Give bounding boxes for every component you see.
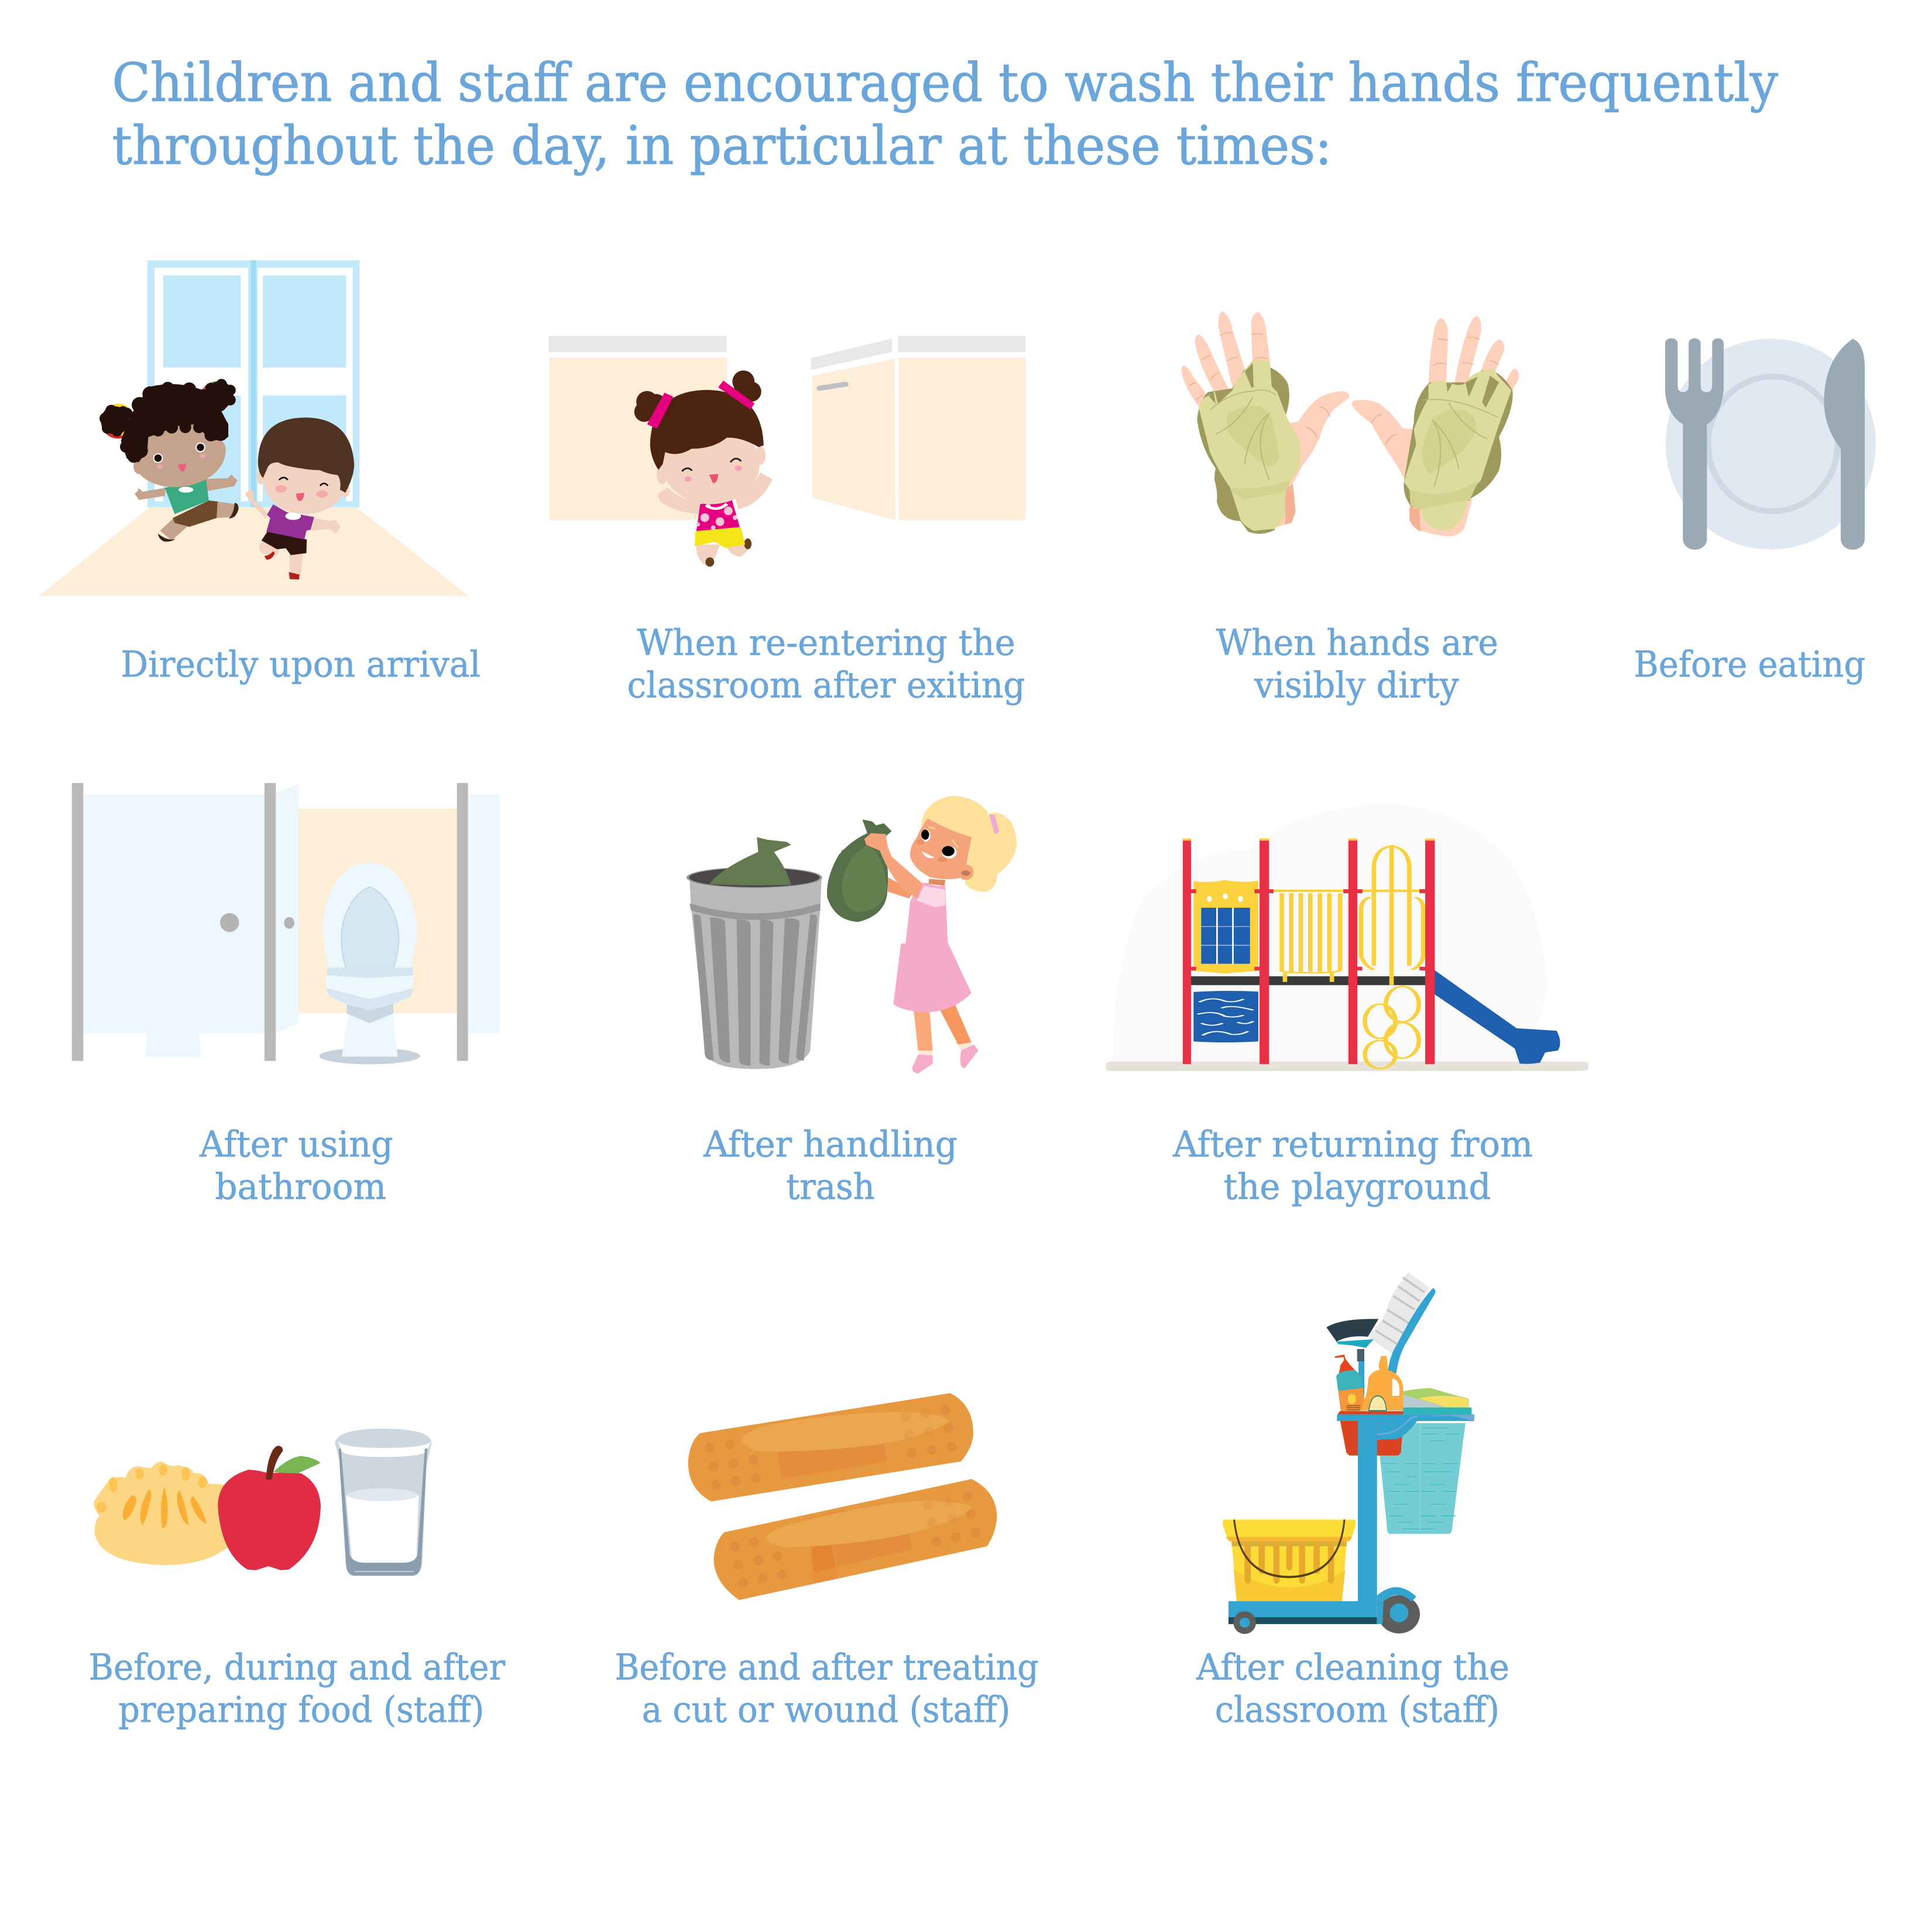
caption — [1196, 1646, 1509, 1731]
caption: bathroom — [215, 1166, 386, 1207]
illustration: girl and trash can — [688, 796, 1017, 1073]
title: Children and staff are encouraged to wash their hands frequently — [112, 53, 1778, 114]
caption: After cleaning the — [1196, 1646, 1509, 1688]
caption: preparing food (staff) — [118, 1689, 484, 1731]
icon: plate, fork and knife — [1665, 338, 1876, 550]
caption — [89, 1646, 506, 1731]
caption: classroom after exiting — [627, 665, 1025, 706]
illustration: children arriving at door — [39, 260, 469, 596]
panel: after handling trash — [688, 796, 1017, 1207]
panel: visibly dirty hands — [1181, 311, 1519, 706]
illustration: girl between cupboard doors — [548, 336, 1026, 567]
caption — [627, 622, 1025, 706]
caption: After using — [199, 1124, 393, 1165]
caption: After returning from — [1172, 1124, 1533, 1165]
illustration: playground structure — [1106, 804, 1588, 1071]
illustration: dirty hands — [1181, 311, 1519, 537]
panel: after using bathroom — [72, 783, 500, 1207]
panel: re-entering the classroom — [548, 336, 1026, 706]
caption: the playground — [1223, 1166, 1491, 1207]
caption: a cut or wound (staff) — [642, 1689, 1010, 1731]
caption — [1216, 622, 1498, 706]
illustration: cleaning cart — [1223, 1272, 1474, 1634]
caption: trash — [786, 1166, 875, 1207]
panel: cleaning the classroom — [1196, 1272, 1509, 1731]
illustration: adhesive bandages — [688, 1393, 997, 1600]
caption: When hands are — [1216, 622, 1498, 664]
caption: Before eating — [1634, 644, 1865, 685]
panel: directly upon arrival — [39, 260, 481, 685]
caption: classroom (staff) — [1215, 1689, 1499, 1731]
caption: visibly dirty — [1254, 665, 1459, 706]
panel: preparing food — [89, 1429, 506, 1731]
caption: After handling — [703, 1124, 958, 1165]
illustration: pie, apple and glass of milk — [94, 1429, 431, 1576]
caption — [703, 1124, 958, 1207]
title: throughout the day, in particular at these times: — [112, 115, 1332, 177]
caption: Directly upon arrival — [121, 644, 481, 685]
caption: Before and after treating — [615, 1646, 1039, 1688]
panel: after returning from the playground — [1106, 804, 1588, 1207]
panel: treating a cut or wound — [615, 1393, 1039, 1731]
caption — [1172, 1124, 1533, 1207]
caption — [615, 1646, 1039, 1731]
caption: When re-entering the — [637, 622, 1015, 664]
caption — [199, 1124, 393, 1207]
illustration: bathroom stall and toilet — [72, 783, 500, 1064]
title — [112, 53, 1778, 177]
panel: before eating — [1634, 338, 1876, 685]
caption: Before, during and after — [89, 1646, 506, 1688]
